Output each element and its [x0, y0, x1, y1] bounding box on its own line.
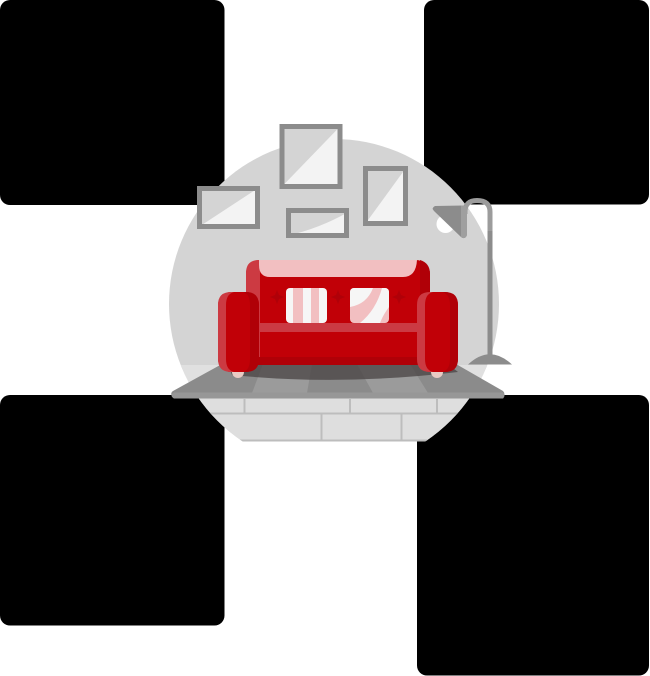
lamp bulb	[436, 215, 454, 233]
left armrest	[218, 292, 259, 372]
right armrest	[417, 292, 458, 372]
sofa top highlight	[259, 260, 417, 277]
frame: bottom centre	[288, 210, 346, 236]
cushion studs	[270, 290, 406, 304]
frame: right	[366, 168, 406, 224]
panel: top right	[424, 0, 649, 204]
lamp shade	[433, 206, 467, 238]
floor lamp	[433, 200, 512, 364]
cushion: swoosh	[350, 288, 389, 323]
lamp arm	[465, 200, 490, 231]
sofa seat band	[259, 323, 419, 332]
brick wall	[198, 398, 470, 442]
panel: bottom right	[417, 395, 649, 676]
lamp base	[468, 354, 512, 364]
sofa	[218, 260, 458, 378]
feet	[232, 366, 244, 378]
panel: bottom left	[0, 395, 224, 626]
cushion: striped	[286, 288, 327, 323]
frame: top centre	[282, 126, 340, 186]
frame: left	[200, 188, 258, 226]
sofa back	[246, 260, 430, 365]
scene: room backdrop circle	[169, 139, 499, 441]
floor edge	[172, 392, 504, 398]
panel: top left	[0, 0, 224, 205]
rug panels	[252, 364, 312, 393]
sofa shadow	[228, 364, 458, 380]
sofa seat shade	[250, 357, 420, 365]
lamp pole	[488, 230, 492, 360]
floor	[171, 364, 504, 398]
